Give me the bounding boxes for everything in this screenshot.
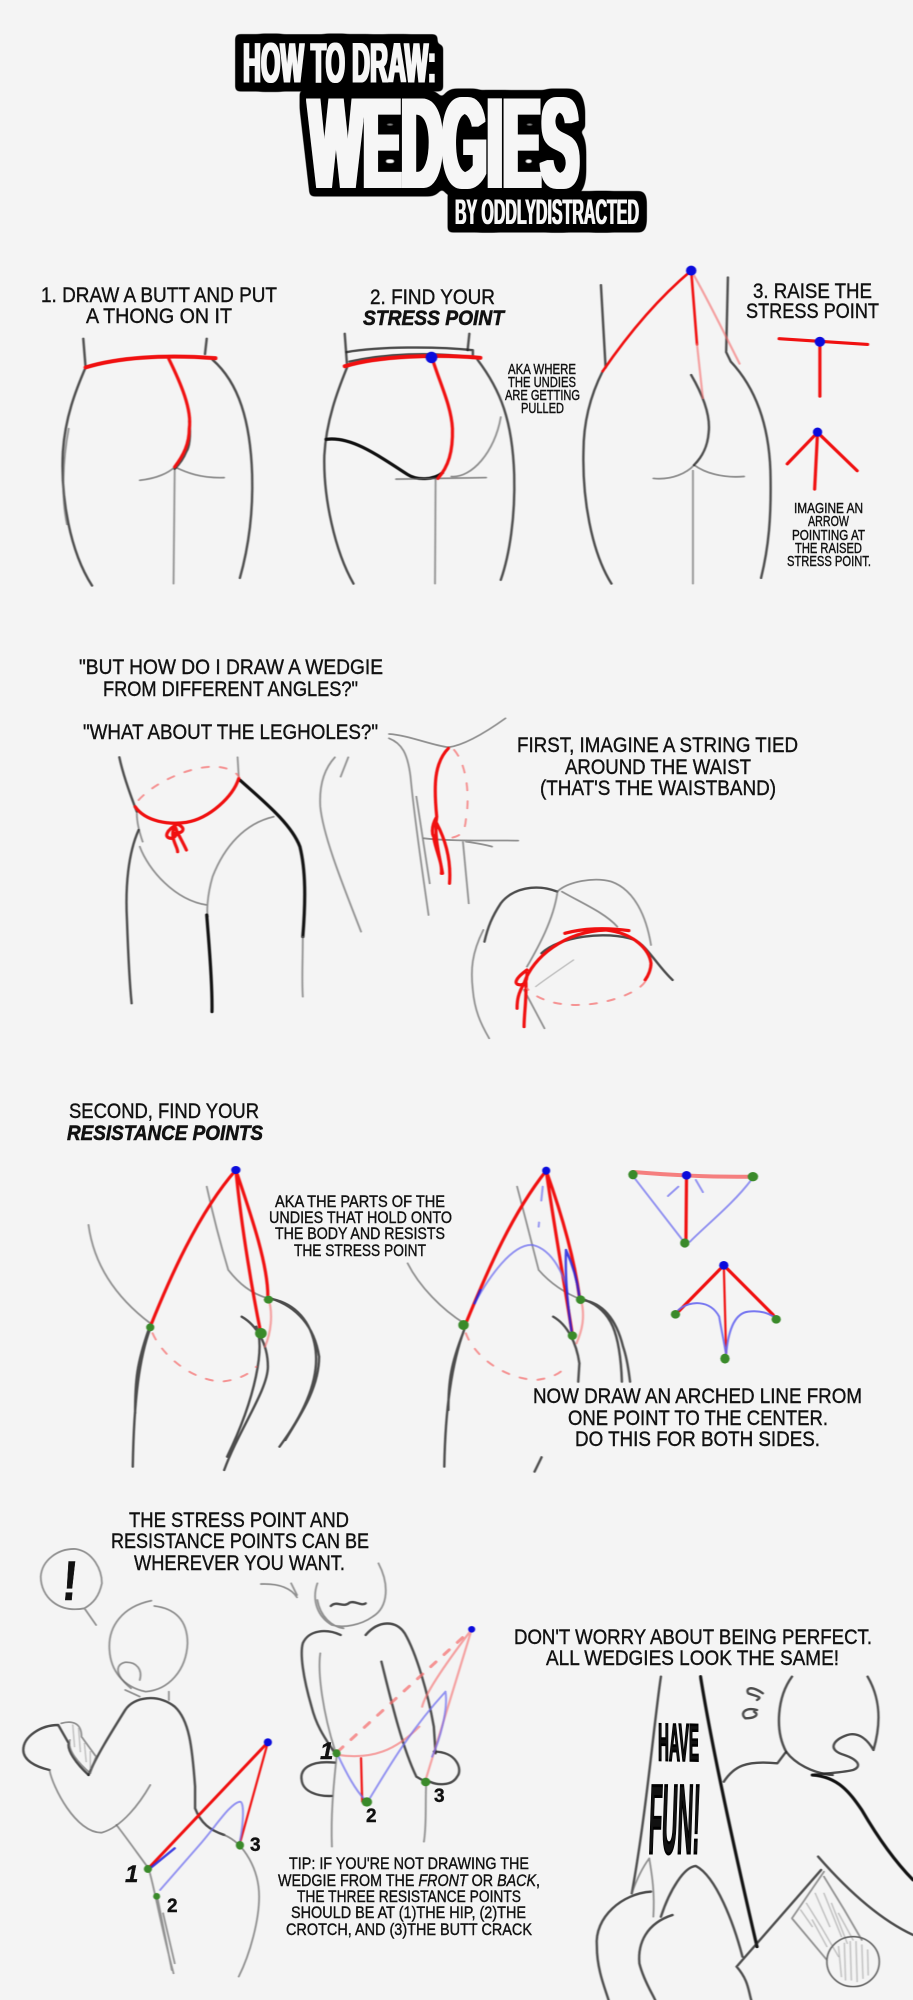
text: tip: WEDGIE FROM THE FRONT OR BACK,	[278, 1871, 540, 1890]
note: stress point definition: AKA WHERE	[508, 362, 576, 378]
hatched arm	[61, 1722, 96, 1773]
text: stress and resistance placement: RESISTANCE POINTS CAN BE	[111, 1529, 369, 1553]
icon: exclamation speech bubble: !	[60, 1549, 80, 1612]
note: imagine an arrow: STRESS POINT.	[787, 554, 871, 570]
diagram: raised arrow shape	[787, 427, 857, 489]
stress point dot	[426, 352, 437, 363]
text: arched line instruction: ONE POINT TO THE CENTER.	[568, 1406, 828, 1430]
note: resistance point definition	[269, 1192, 452, 1260]
stress point dot	[231, 1166, 240, 1174]
text: arched line instruction	[533, 1384, 862, 1451]
note: imagine an arrow: THE RAISED	[795, 541, 862, 557]
text: tip: THE THREE RESISTANCE POINTS	[297, 1887, 521, 1906]
note: imagine an arrow: IMAGINE AN	[794, 501, 863, 517]
step 2 heading: STRESS POINT	[363, 306, 506, 330]
text: first imagine a string: (THAT'S THE WAISTBAND)	[540, 776, 776, 800]
text: BY ODDLYDISTRACTED	[455, 193, 639, 232]
text: arched line instruction: DO THIS FOR BOTH SIDES.	[575, 1427, 820, 1451]
step 2 heading	[363, 285, 506, 330]
title	[243, 31, 639, 232]
text: tip: TIP: IF YOU'RE NOT DRAWING THE	[289, 1854, 529, 1873]
resistance point dots	[146, 1296, 273, 1339]
figure: character from the side	[23, 1601, 272, 1977]
step 3 heading	[746, 279, 879, 323]
figure: step 1 sketch	[63, 339, 252, 586]
text: first imagine a string: FIRST, IMAGINE A STRING TIED	[517, 733, 798, 757]
title: WEDGIES	[309, 72, 579, 214]
note: imagine an arrow: POINTING AT	[792, 528, 865, 544]
text: tip: CROTCH, AND (3)THE BUTT CRACK	[286, 1920, 533, 1939]
heading: second, resistance points: RESISTANCE POINTS	[67, 1121, 264, 1145]
figure: front view with tied string	[119, 757, 361, 1012]
step 2 heading: 2. FIND YOUR	[370, 285, 495, 309]
figure: arched lines sketch	[408, 1167, 630, 1472]
text: HAVE	[658, 1714, 699, 1773]
text: FUN!	[647, 1764, 702, 1874]
stress point dot	[542, 1167, 550, 1175]
figure: back three-quarter view with tied string	[472, 880, 673, 1038]
resistance point dots	[332, 1749, 430, 1807]
figure: step 3 sketch	[583, 266, 771, 584]
note: stress point definition	[505, 362, 580, 417]
figure: resistance points sketch	[89, 1166, 319, 1470]
step 1 heading: A THONG ON IT	[86, 304, 232, 328]
text: tip: SHOULD BE AT (1)THE HIP, (2)THE	[291, 1903, 526, 1922]
text: angles and legholes questions: FROM DIFFERENT ANGLES?"	[103, 677, 358, 701]
figure: closing cartoon	[597, 1677, 913, 2000]
note: resistance point definition: UNDIES THAT HOLD ONTO	[269, 1208, 452, 1227]
text: stress and resistance placement: WHEREVER YOU WANT.	[134, 1551, 345, 1575]
step 1 heading	[41, 283, 277, 328]
resistance point dots	[144, 1841, 244, 1900]
label: numbers on side figure	[125, 1835, 261, 1917]
heading: second, resistance points	[67, 1099, 264, 1145]
step 3 heading: STRESS POINT	[746, 299, 879, 323]
label: numbers on front figure	[320, 1738, 445, 1827]
text: angles and legholes questions	[79, 655, 383, 744]
text: stress and resistance placement: THE STRESS POINT AND	[129, 1508, 349, 1532]
text: first imagine a string	[517, 733, 798, 800]
note: resistance point definition: THE BODY AND RESISTS	[275, 1224, 445, 1243]
hatched leg and foot	[792, 1872, 879, 1987]
text: angles and legholes questions: "BUT HOW DO I DRAW A WEDGIE	[79, 655, 383, 679]
step 3 heading: 3. RAISE THE	[753, 279, 872, 303]
text: don't worry	[514, 1625, 872, 1670]
note: resistance point definition: AKA THE PARTS OF THE	[275, 1192, 445, 1211]
label: numbers on side figure: 1	[125, 1861, 138, 1888]
title: HOW TO DRAW:	[243, 31, 436, 94]
diagram: arched lines between points	[671, 1261, 781, 1364]
label: numbers on side figure: 3	[250, 1835, 261, 1856]
text: angles and legholes questions: "WHAT ABOUT THE LEGHOLES?"	[83, 720, 378, 744]
note: stress point definition: THE UNDIES	[508, 375, 576, 391]
note: stress point definition: ARE GETTING	[505, 388, 580, 404]
text: arched line instruction: NOW DRAW AN ARCHED LINE FROM	[533, 1384, 862, 1408]
label: have fun	[647, 1714, 702, 1874]
stress point dot	[468, 1626, 475, 1633]
resistance point dots	[458, 1295, 585, 1340]
figure: step 2 sketch	[324, 334, 514, 584]
diagram: T shape with stress point	[779, 337, 868, 396]
note: imagine an arrow	[787, 501, 871, 570]
text: don't worry: ALL WEDGIES LOOK THE SAME!	[546, 1646, 839, 1670]
note: stress point definition: PULLED	[521, 401, 564, 417]
stress point dot	[686, 266, 696, 276]
stress point dot	[264, 1738, 272, 1746]
note: resistance point definition: THE STRESS POINT	[294, 1241, 426, 1260]
step 1 heading: 1. DRAW A BUTT AND PUT	[41, 283, 277, 307]
figure: character from the front	[261, 1563, 475, 1847]
label: numbers on side figure: 2	[167, 1896, 178, 1917]
heading: second, resistance points: SECOND, FIND YOUR	[69, 1099, 259, 1123]
text: tip	[278, 1854, 540, 1939]
text: first imagine a string: AROUND THE WAIST	[565, 755, 751, 779]
label: numbers on front figure: 1	[320, 1738, 333, 1765]
label: numbers on front figure: 3	[434, 1786, 445, 1807]
text: stress and resistance placement	[111, 1508, 369, 1575]
note: imagine an arrow: ARROW	[808, 514, 849, 530]
figure: side view with tied string	[389, 718, 518, 915]
label: numbers on front figure: 2	[366, 1806, 377, 1827]
diagram: triangle of points	[628, 1170, 758, 1248]
icon: exclamation speech bubble	[41, 1549, 102, 1625]
